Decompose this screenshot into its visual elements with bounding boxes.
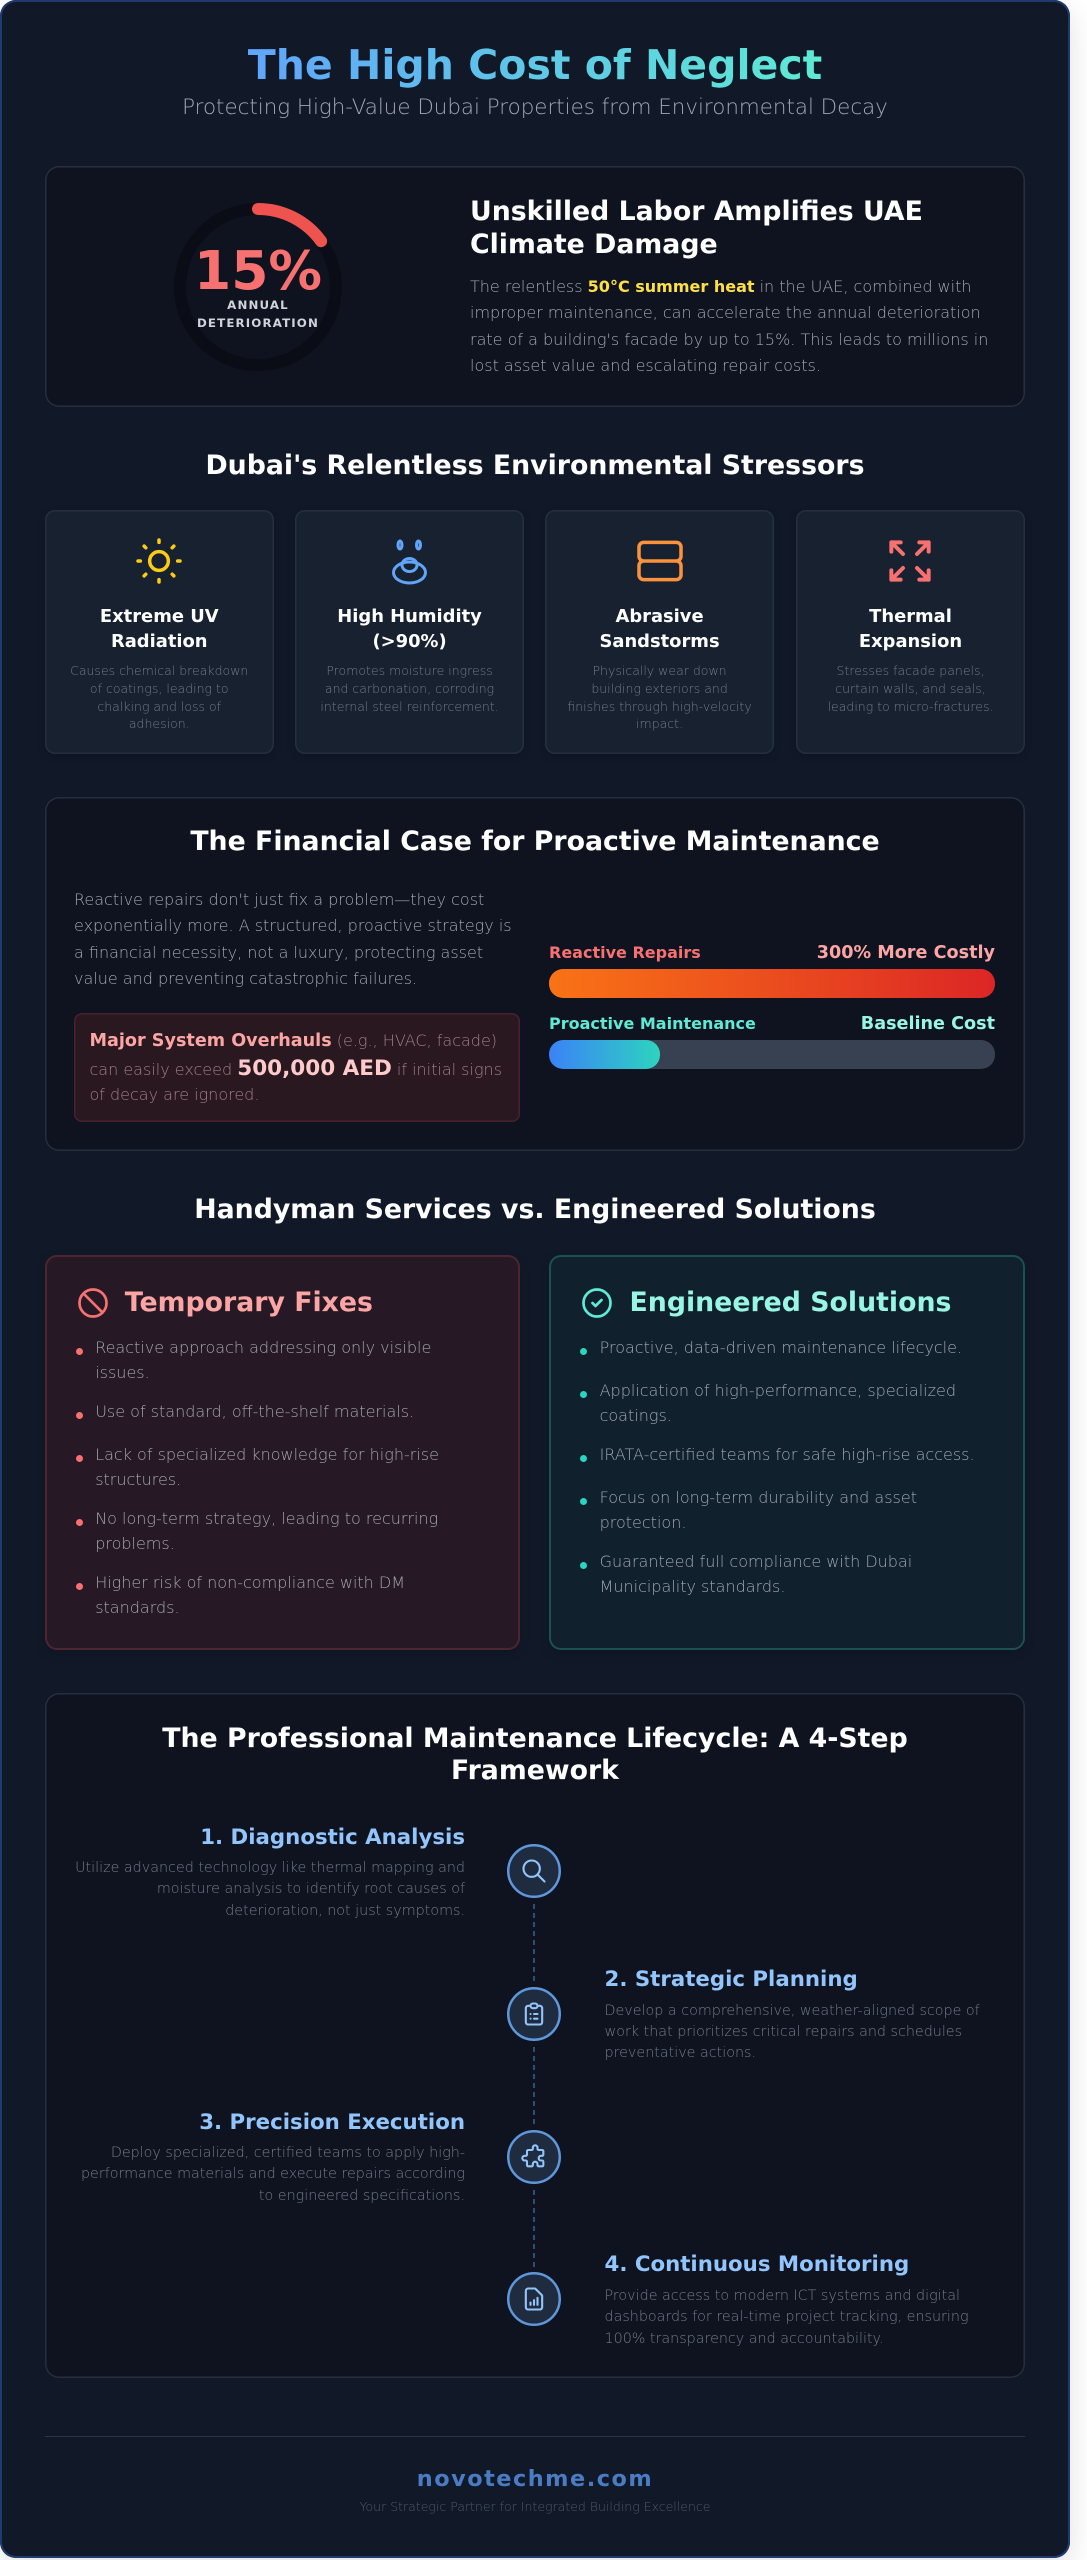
card title: Thermal: [869, 606, 952, 627]
card text: finishes through high-velocity: [567, 699, 752, 714]
list item: Proactive, data-driven maintenance lifecycle.: [600, 1338, 962, 1357]
card title: [599, 606, 720, 652]
bar label: reactive: Reactive Repairs: [549, 943, 701, 962]
panel heading: [162, 1722, 908, 1786]
list: engineered solutions: coatings.: [600, 1406, 672, 1425]
card text: Promotes moisture ingress: [326, 663, 493, 678]
card title: [100, 606, 219, 652]
icon: expand arrows: [889, 540, 931, 582]
list: temporary fixes: structures.: [95, 1470, 181, 1489]
bar value: proactive: Baseline Cost: [861, 1014, 995, 1034]
card: thermal expansion: [796, 510, 1025, 754]
list: engineered solutions: protection.: [600, 1513, 686, 1532]
footer tagline: Your Strategic Partner for Integrated Building Excellence: [360, 2499, 710, 2514]
icon: check circle: [582, 1288, 612, 1318]
heading: comparison: Handyman Services vs. Engineered Solutions: [194, 1194, 876, 1225]
card text: impact.: [636, 716, 683, 731]
title: The High Cost of Neglect: [248, 41, 822, 89]
icon: humidity: [392, 540, 427, 584]
step text: Utilize advanced technology like thermal mapping and: [75, 1860, 465, 1876]
card text: building exteriors and: [591, 681, 728, 696]
card title: Extreme UV: [100, 606, 219, 627]
list item: Higher risk of non-compliance with DM: [95, 1573, 405, 1592]
list item: Lack of specialized knowledge for high-rise: [95, 1445, 439, 1464]
step 4: [507, 2249, 1007, 2327]
card text: Stresses facade panels,: [837, 663, 984, 678]
step 2: [507, 1964, 1007, 2040]
list item: [76, 1509, 438, 1553]
card text: and carbonation, corroding: [325, 681, 494, 696]
panel text: exponentially more. A structured, proactive strategy is: [74, 916, 512, 935]
footer brand: novotechme.com: [417, 2466, 653, 2492]
step text: Deploy specialized, certified teams to apply high-: [111, 2145, 465, 2161]
panel text: rate of a building's facade by up to 15%. This leads to millions in: [470, 330, 988, 349]
list item: [76, 1338, 431, 1382]
timeline connector lines: [533, 1904, 535, 2267]
list item: Reactive approach addressing only visible: [95, 1338, 431, 1357]
panel: engineered solutions: [549, 1255, 1025, 1650]
list item: Focus on long-term durability and asset: [600, 1488, 917, 1507]
icon: report: [507, 2272, 561, 2326]
step text: Develop a comprehensive, weather-aligned scope of: [604, 2002, 980, 2018]
gauge label: ANNUAL: [227, 298, 289, 312]
callout: major overhauls: [74, 1013, 520, 1122]
panel text: lost asset value and escalating repair costs.: [470, 356, 821, 375]
panel heading: The Professional Maintenance Lifecycle: A 4-Step: [162, 1722, 908, 1754]
step text: to engineered specifications.: [259, 2188, 465, 2204]
panel: lifecycle: [45, 1693, 1025, 2378]
callout line 1: Major System Overhauls (e.g., HVAC, facade): [90, 1031, 497, 1051]
card title: Abrasive: [615, 606, 704, 627]
card: sandstorms: [545, 510, 774, 754]
step 1: [75, 1824, 561, 1919]
panel text: [74, 890, 512, 988]
list: temporary fixes: problems.: [95, 1534, 175, 1553]
card text: Physically wear down: [592, 663, 727, 678]
step 3: [74, 2107, 562, 2185]
list: temporary fixes: issues.: [95, 1363, 150, 1382]
callout line 3: of decay are ignored.: [90, 1085, 259, 1104]
card text: [828, 663, 993, 714]
step text: performance materials and execute repairs according: [81, 2166, 465, 2182]
gauge label: [197, 298, 319, 330]
list item: [76, 1445, 439, 1489]
step title: 3. Precision Execution: [199, 2110, 465, 2134]
footer: [0, 2464, 1070, 2520]
bar: proactive track and fill: [549, 1040, 995, 1069]
step title: 1. Diagnostic Analysis: [200, 1824, 465, 1850]
card: extreme UV: [45, 510, 274, 754]
list item: [580, 1488, 917, 1532]
panel text: The relentless 50°C summer heat in the UAE, combined with: [470, 277, 972, 296]
card text: leading to micro-fractures.: [828, 699, 993, 714]
card text: [320, 663, 499, 714]
step text: preventative actions.: [604, 2045, 756, 2061]
step text: Provide access to modern ICT systems and digital: [604, 2288, 960, 2304]
icon: server layers: [637, 540, 683, 582]
step title: 2. Strategic Planning: [604, 1967, 858, 1992]
step text: dashboards for real-time project tracking, ensuring: [604, 2309, 969, 2325]
icon: ban: [78, 1288, 108, 1318]
subtitle: Protecting High-Value Dubai Properties from Environmental Decay: [182, 95, 888, 120]
gauge value: 15%: [194, 239, 322, 302]
card text: chalking and loss of: [97, 699, 221, 714]
step text: 100% transparency and accountability.: [604, 2331, 884, 2347]
step text: [604, 2286, 969, 2350]
card title: [337, 606, 482, 652]
card title: Radiation: [111, 631, 208, 652]
panel heading: [470, 196, 923, 260]
bar label: proactive: Proactive Maintenance: [549, 1014, 756, 1033]
panel title: Temporary Fixes: [125, 1287, 373, 1318]
panel: temporary fixes: standards.: [95, 1598, 180, 1617]
bar chart: reactive vs proactive cost: [549, 943, 995, 1069]
panel text: value and preventing catastrophic failures.: [74, 969, 417, 988]
panel heading: Unskilled Labor Amplifies UAE: [470, 196, 923, 227]
panel: engineered solutions: Municipality standards.: [600, 1576, 785, 1596]
list: temporary fixes: [76, 1338, 439, 1617]
panel: financial case: [45, 797, 1025, 1151]
card title: High Humidity: [337, 606, 482, 627]
step text: work that prioritizes critical repairs and schedules: [604, 2024, 962, 2040]
card text: curtain walls, and seals,: [835, 681, 986, 696]
card: humidity: [295, 510, 524, 754]
panel text: Reactive repairs don't just fix a problem—they cost: [74, 890, 484, 909]
step text: moisture analysis to identify root causes of: [157, 1881, 465, 1897]
gauge label: DETERIORATION: [197, 316, 319, 330]
panel text: a financial necessity, not a luxury, protecting asset: [74, 943, 483, 962]
callout line 2: can easily exceed 500,000 AED if initial signs: [90, 1056, 502, 1081]
card text: adhesion.: [129, 716, 190, 731]
panel text: [470, 277, 988, 375]
step text: [604, 2000, 980, 2064]
icon: clipboard: [507, 1986, 561, 2040]
panel title: Engineered Solutions: [630, 1287, 951, 1318]
gauge ring: [174, 203, 342, 371]
header: [182, 41, 888, 120]
card text: [70, 663, 248, 731]
list: engineered solutions: [580, 1338, 975, 1596]
card text: internal steel reinforcement.: [320, 699, 499, 714]
gauge: 15% annual deterioration: [174, 203, 342, 371]
card title: Sandstorms: [599, 631, 720, 652]
card text: [567, 663, 752, 731]
list item: [580, 1381, 956, 1425]
bar value: reactive: 300% More Costly: [817, 943, 995, 963]
list item: No long-term strategy, leading to recurring: [95, 1509, 438, 1528]
icon: sun: [136, 538, 182, 584]
step text: deterioration, not just symptoms.: [225, 1903, 465, 1919]
list item: Use of standard, off-the-shelf materials.: [95, 1402, 414, 1421]
card text: Causes chemical breakdown: [70, 663, 248, 678]
card title: [859, 606, 962, 652]
panel heading: Climate Damage: [470, 229, 718, 260]
panel text: improper maintenance, can accelerate the annual deterioration: [470, 303, 981, 322]
bar: reactive: [549, 969, 995, 998]
list item: IRATA-certified teams for safe high-rise access.: [600, 1445, 975, 1464]
list item: Guaranteed full compliance with Dubai: [600, 1552, 912, 1570]
icon: search: [507, 1844, 561, 1898]
panel: temporary fixes: [45, 1255, 520, 1650]
step title: 4. Continuous Monitoring: [604, 2252, 909, 2277]
card title: (>90%): [372, 631, 447, 652]
heading: stressors: Dubai's Relentless Environmental Stressors: [205, 450, 865, 481]
panel heading: Framework: [451, 1755, 619, 1786]
card title: Expansion: [859, 631, 962, 652]
step text: [75, 1860, 465, 1919]
step text: [81, 2143, 465, 2207]
list item: Application of high-performance, specialized: [600, 1381, 956, 1400]
list item: [76, 1573, 405, 1617]
panel: annual deterioration: [45, 166, 1025, 407]
panel heading: The Financial Case for Proactive Maintenance: [190, 826, 880, 857]
icon: puzzle: [507, 2130, 561, 2184]
list item: [580, 1552, 912, 1596]
card text: of coatings, leading to: [90, 681, 229, 696]
